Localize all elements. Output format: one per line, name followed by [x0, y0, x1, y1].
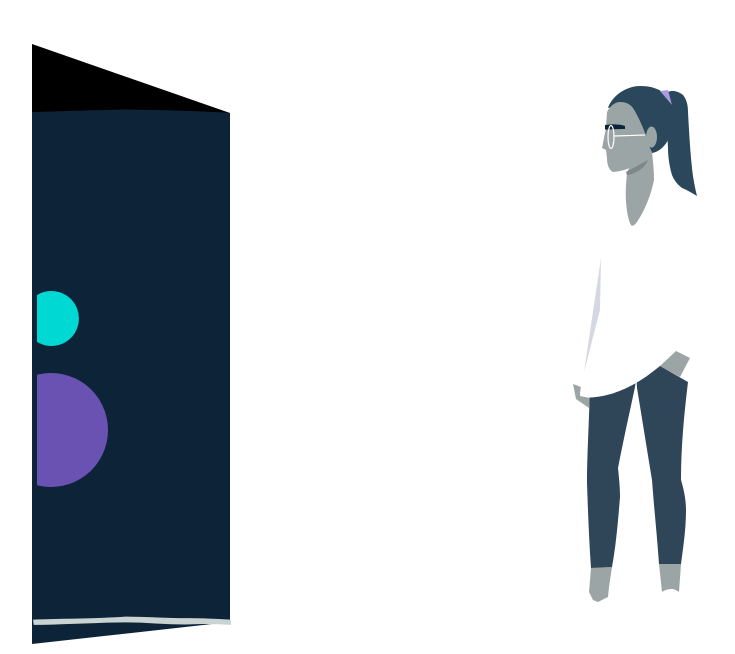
left leg: [587, 380, 636, 568]
hair band: [660, 90, 672, 105]
left hand: [573, 384, 590, 408]
right leg: [636, 366, 688, 564]
glasses temple: [614, 135, 645, 136]
glasses: [608, 126, 645, 148]
glasses lens: [608, 126, 614, 148]
ear: [646, 126, 657, 148]
door body: navy: [32, 110, 230, 644]
left foot: [589, 567, 612, 602]
circle: teal: [37, 291, 79, 346]
right foot: [659, 564, 681, 592]
panel: dark door: [32, 44, 230, 644]
ponytail: [666, 91, 697, 196]
circle: purple: [37, 373, 108, 487]
door bottom highlight line: [34, 617, 230, 624]
face: [602, 102, 649, 172]
shirt sleeve shadow: [584, 258, 601, 372]
hair: [608, 86, 672, 153]
neck shadow: [626, 160, 648, 175]
eyebrow: [605, 124, 625, 130]
shirt hem: [580, 350, 660, 398]
door top: black wedge: [32, 44, 230, 113]
right hand: [660, 351, 690, 377]
neck: [626, 140, 654, 226]
figure: woman with glasses: [573, 86, 697, 602]
